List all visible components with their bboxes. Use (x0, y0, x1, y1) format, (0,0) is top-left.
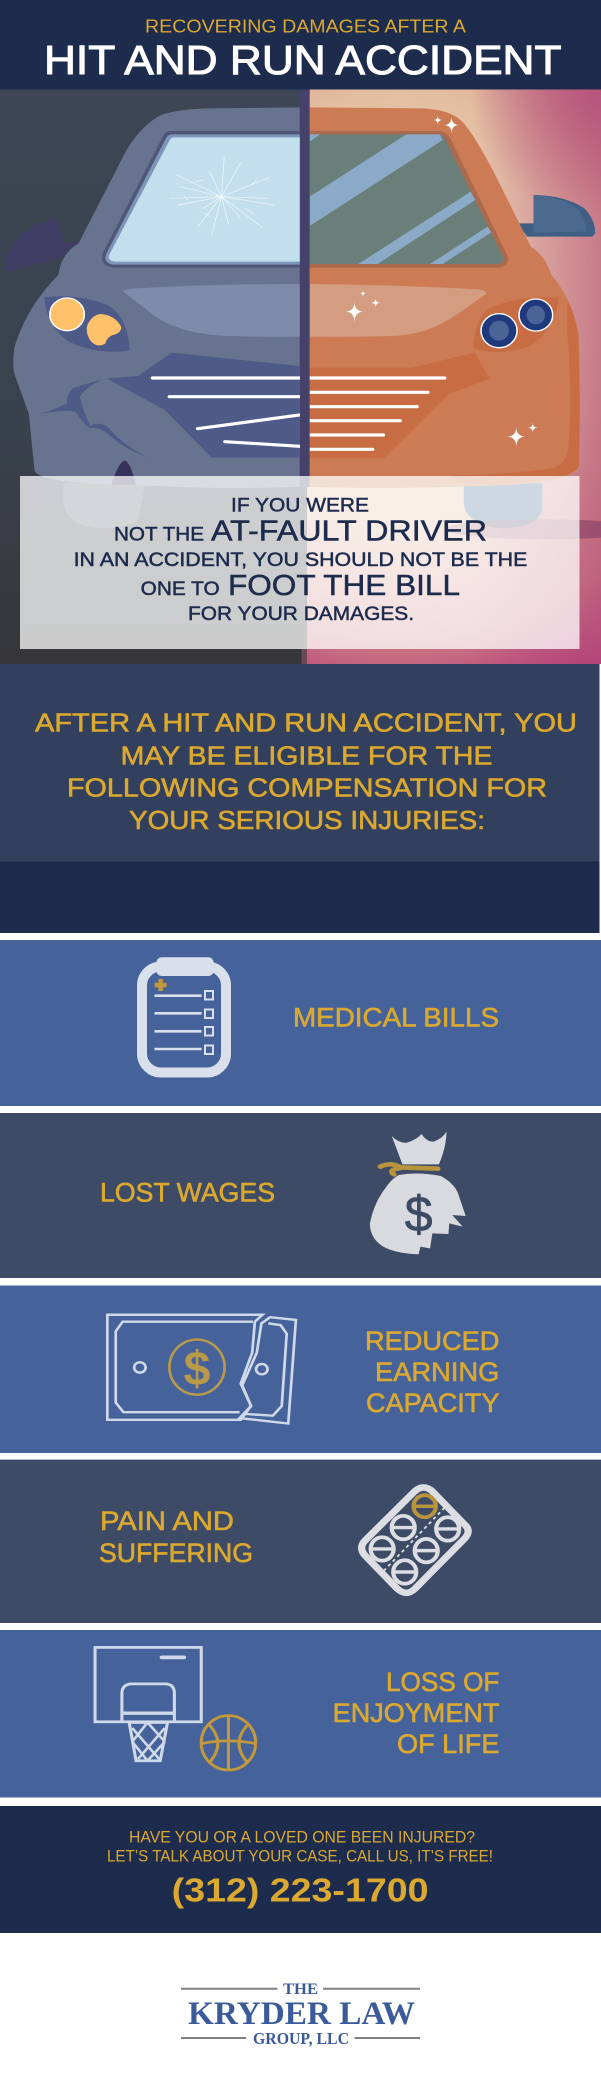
translucent message panel (20, 476, 580, 649)
band: medical bills (0, 940, 601, 1106)
right window (310, 131, 508, 268)
call to action footer (0, 1806, 601, 1933)
compensation intro heading (35, 710, 577, 835)
compensation intro section (0, 664, 600, 933)
label: pain and suffering: PAIN AND (100, 1506, 234, 1536)
grille bars right (310, 378, 445, 449)
bumper notch (111, 461, 136, 485)
panel text: ONE TO (141, 579, 220, 600)
icon: basketball hoop and ball (95, 1647, 256, 1770)
label: reduced earning capacity: REDUCED (365, 1326, 499, 1356)
band: lost wages (0, 1113, 601, 1278)
left hood highlight (123, 284, 300, 337)
law firm logo: THE (283, 1981, 318, 1998)
label: reduced earning capacity (365, 1326, 499, 1418)
panel text (74, 495, 527, 625)
label: pain and suffering (99, 1506, 253, 1568)
compensation intro heading: MAY BE ELIGIBLE FOR THE (121, 742, 492, 770)
law firm logo: GROUP, LLC (253, 2029, 349, 2048)
body crack (40, 380, 148, 457)
label: pain and suffering: SUFFERING (99, 1538, 253, 1568)
header subtitle: RECOVERING DAMAGES AFTER A (145, 16, 467, 37)
label: medical bills: MEDICAL BILLS (293, 1003, 499, 1033)
sparkles (345, 116, 538, 447)
icon: money bag (370, 1132, 466, 1254)
label: loss of enjoyment of life: OF LIFE (397, 1729, 499, 1759)
right body side shading (452, 300, 580, 484)
right mirror (517, 195, 595, 237)
label: loss of enjoyment of life: ENJOYMENT (333, 1698, 499, 1728)
panel text: IF YOU WERE (231, 495, 369, 517)
icon: pill blister pack (362, 1487, 468, 1593)
band: loss of enjoyment of life (0, 1630, 601, 1798)
law firm logo: KRYDER LAW (188, 1996, 415, 2032)
panel text: IN AN ACCIDENT, YOU SHOULD NOT BE THE (74, 549, 527, 571)
panel text: AT-FAULT DRIVER (211, 516, 487, 548)
hero illustration: damaged and repaired car (0, 90, 601, 664)
right car body (310, 107, 580, 488)
header banner (0, 0, 601, 90)
header title: HIT AND RUN ACCIDENT (44, 37, 562, 83)
left headlight (44, 296, 130, 352)
compensation intro heading: AFTER A HIT AND RUN ACCIDENT, YOU (35, 710, 577, 738)
compensation intro heading: FOLLOWING COMPENSATION FOR (67, 775, 547, 803)
compensation intro heading: YOUR SERIOUS INJURIES: (129, 807, 485, 835)
label: reduced earning capacity: EARNING (375, 1357, 499, 1387)
label: reduced earning capacity: CAPACITY (366, 1388, 499, 1418)
grille bars left (153, 378, 300, 446)
wheels and ground shadow (63, 483, 601, 539)
panel text: NOT THE (114, 525, 204, 546)
phone number: (312) 223-1700 (172, 1872, 428, 1909)
icon: torn dollar bill: $ (184, 1343, 211, 1396)
car artwork (5, 107, 601, 539)
right hood highlight (310, 284, 486, 337)
left grille (107, 353, 300, 458)
left car body (13, 107, 300, 488)
panel text: FOOT THE BILL (228, 570, 460, 602)
label: lost wages: LOST WAGES (100, 1178, 275, 1208)
shattered glass crack (169, 157, 274, 235)
icon: money bag: $ (405, 1186, 433, 1242)
label: loss of enjoyment of life (333, 1667, 499, 1759)
centre divider (300, 90, 310, 487)
panel text: FOR YOUR DAMAGES. (188, 603, 414, 625)
right grille (310, 353, 490, 458)
icon: clipboard (142, 957, 226, 1072)
call to action text: HAVE YOU OR A LOVED ONE BEEN INJURED? (129, 1828, 475, 1846)
law firm logo (181, 1981, 420, 2048)
left window (102, 131, 300, 268)
left mirror (5, 218, 79, 271)
call to action text line 2: LET’S TALK ABOUT YOUR CASE, CALL US, IT’S FREE! (107, 1847, 493, 1865)
right headlight (473, 297, 558, 352)
band: reduced earning capacity (0, 1286, 601, 1453)
label: loss of enjoyment of life: LOSS OF (386, 1667, 499, 1697)
icon: torn dollar bill (107, 1315, 296, 1424)
band: pain and suffering (0, 1460, 601, 1623)
